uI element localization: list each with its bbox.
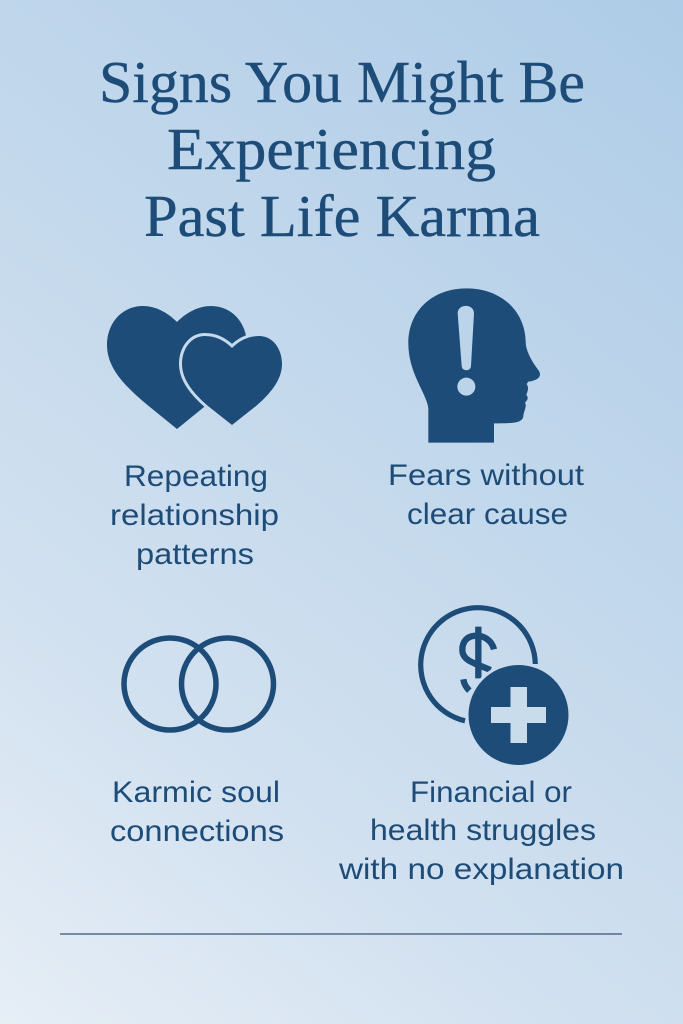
icon: overlapping hearts [107, 306, 282, 429]
icon: interlocking rings [124, 638, 274, 730]
label: repeating relationship patterns: relationship [110, 499, 279, 532]
icon: coin with medical plus [421, 608, 568, 765]
label: repeating relationship patterns: Repeating [124, 460, 268, 493]
label: repeating relationship patterns [110, 460, 279, 571]
label: fears without clear cause: clear cause [407, 498, 568, 531]
label: financial or health struggles [338, 776, 624, 886]
title: Past Life Karma [144, 183, 540, 249]
label: fears without clear cause: Fears without [388, 459, 585, 492]
label: repeating relationship patterns: patterns [136, 538, 254, 571]
label: karmic soul connections [110, 776, 284, 848]
label: financial or health struggles: Financial or [410, 776, 572, 809]
label: karmic soul connections: connections [110, 815, 284, 848]
title: Experiencing [167, 116, 496, 182]
label: fears without clear cause [388, 459, 585, 531]
icon: head with exclamation mark [408, 288, 540, 443]
label: financial or health struggles: health struggles [370, 814, 596, 847]
label: financial or health struggles: with no explanation [338, 853, 624, 886]
label: karmic soul connections: Karmic soul [112, 776, 280, 809]
title: Signs You Might Be [99, 49, 585, 115]
title [99, 49, 585, 249]
